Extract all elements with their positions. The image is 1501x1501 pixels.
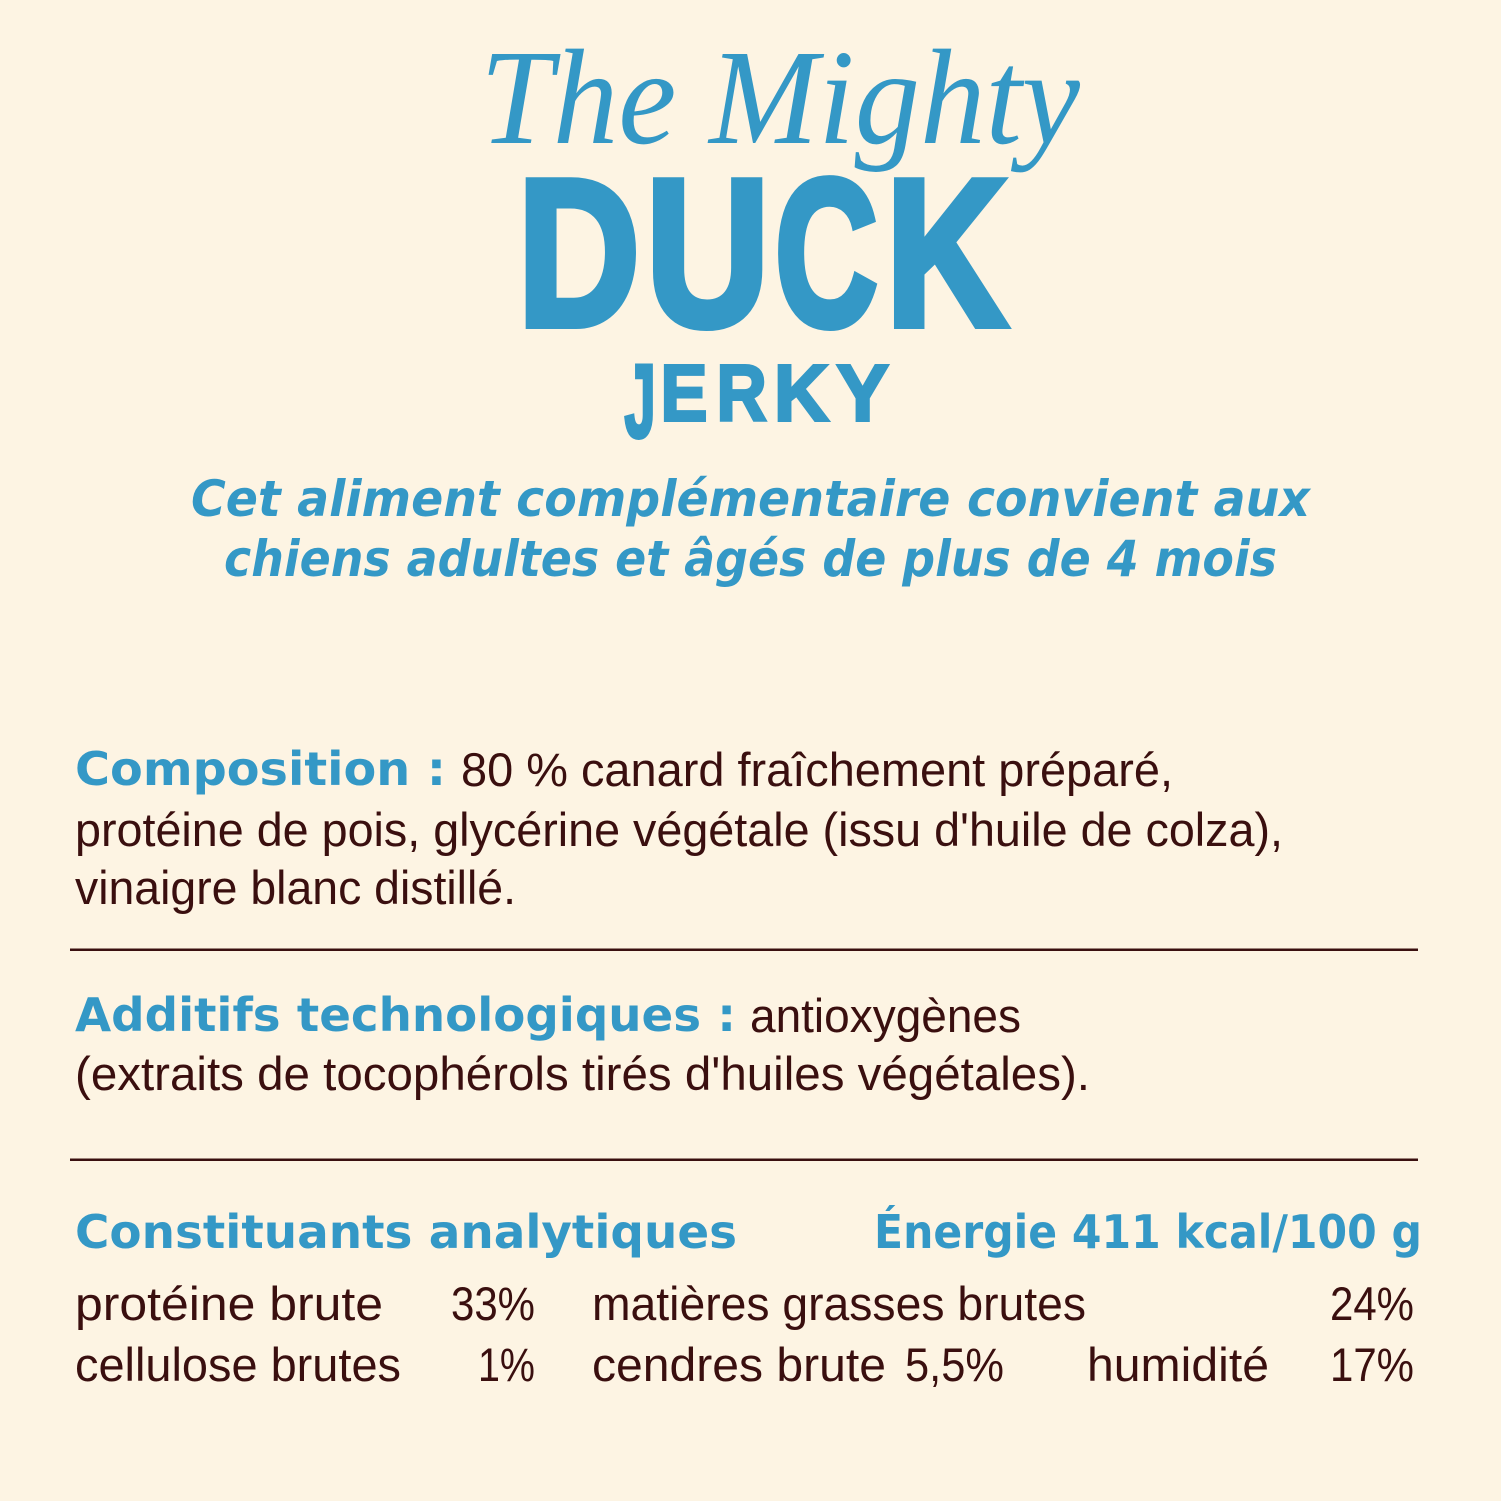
analytical constituents table: 17% [1330, 1338, 1414, 1391]
composition text block: vinaigre blanc distillé. [75, 861, 516, 914]
composition text block: 80 % canard fraîchement préparé, [461, 743, 1173, 796]
composition text block: Composition : [75, 742, 446, 796]
subtitle: Cet aliment complémentaire convient aux [191, 470, 1312, 528]
analytical constituents table: 24% [1330, 1277, 1414, 1330]
analytical constituents table: 5,5% [905, 1338, 1004, 1391]
energy value: Énergie 411 kcal/100 g [874, 1205, 1422, 1259]
title: JERKY: R [716, 348, 767, 438]
composition text block [75, 742, 1283, 914]
analytical constituents table: matières grasses brutes [592, 1277, 1086, 1330]
additives text block: Additifs technologiques : [75, 988, 736, 1042]
analytical constituents table: 33% [451, 1277, 535, 1330]
additives text block: (extraits de tocophérols tirés d'huiles végétales). [75, 1047, 1090, 1100]
additives text block: antioxygènes [750, 989, 1021, 1042]
title: DUCK: D [518, 137, 640, 370]
analytical constituents heading: Constituants analytiques [75, 1205, 737, 1259]
title: JERKY: Y [836, 348, 889, 438]
subtitle [191, 470, 1312, 588]
analytical constituents table: cendres brute [592, 1338, 886, 1391]
title: JERKY [624, 342, 889, 459]
additives text block [75, 988, 1090, 1100]
analytical constituents table: cellulose brutes [75, 1338, 401, 1391]
title: The Mighty: The Mighty [480, 23, 1081, 173]
title: JERKY: K [774, 348, 829, 438]
title: DUCK: K [886, 137, 1007, 370]
title: JERKY: E [660, 348, 707, 437]
analytical constituents table: humidité [1087, 1338, 1269, 1391]
title: JERKY: J [624, 342, 656, 459]
subtitle: chiens adultes et âgés de plus de 4 mois [224, 530, 1277, 588]
analytical constituents table: protéine brute [75, 1277, 383, 1330]
title: DUCK [518, 136, 1007, 370]
analytical constituents table [75, 1277, 1414, 1391]
analytical constituents table: 1% [478, 1338, 535, 1391]
composition text block: protéine de pois, glycérine végétale (issu d'huile de colza), [75, 803, 1283, 856]
title: DUCK: U [646, 137, 769, 370]
title: DUCK: C [775, 136, 878, 369]
